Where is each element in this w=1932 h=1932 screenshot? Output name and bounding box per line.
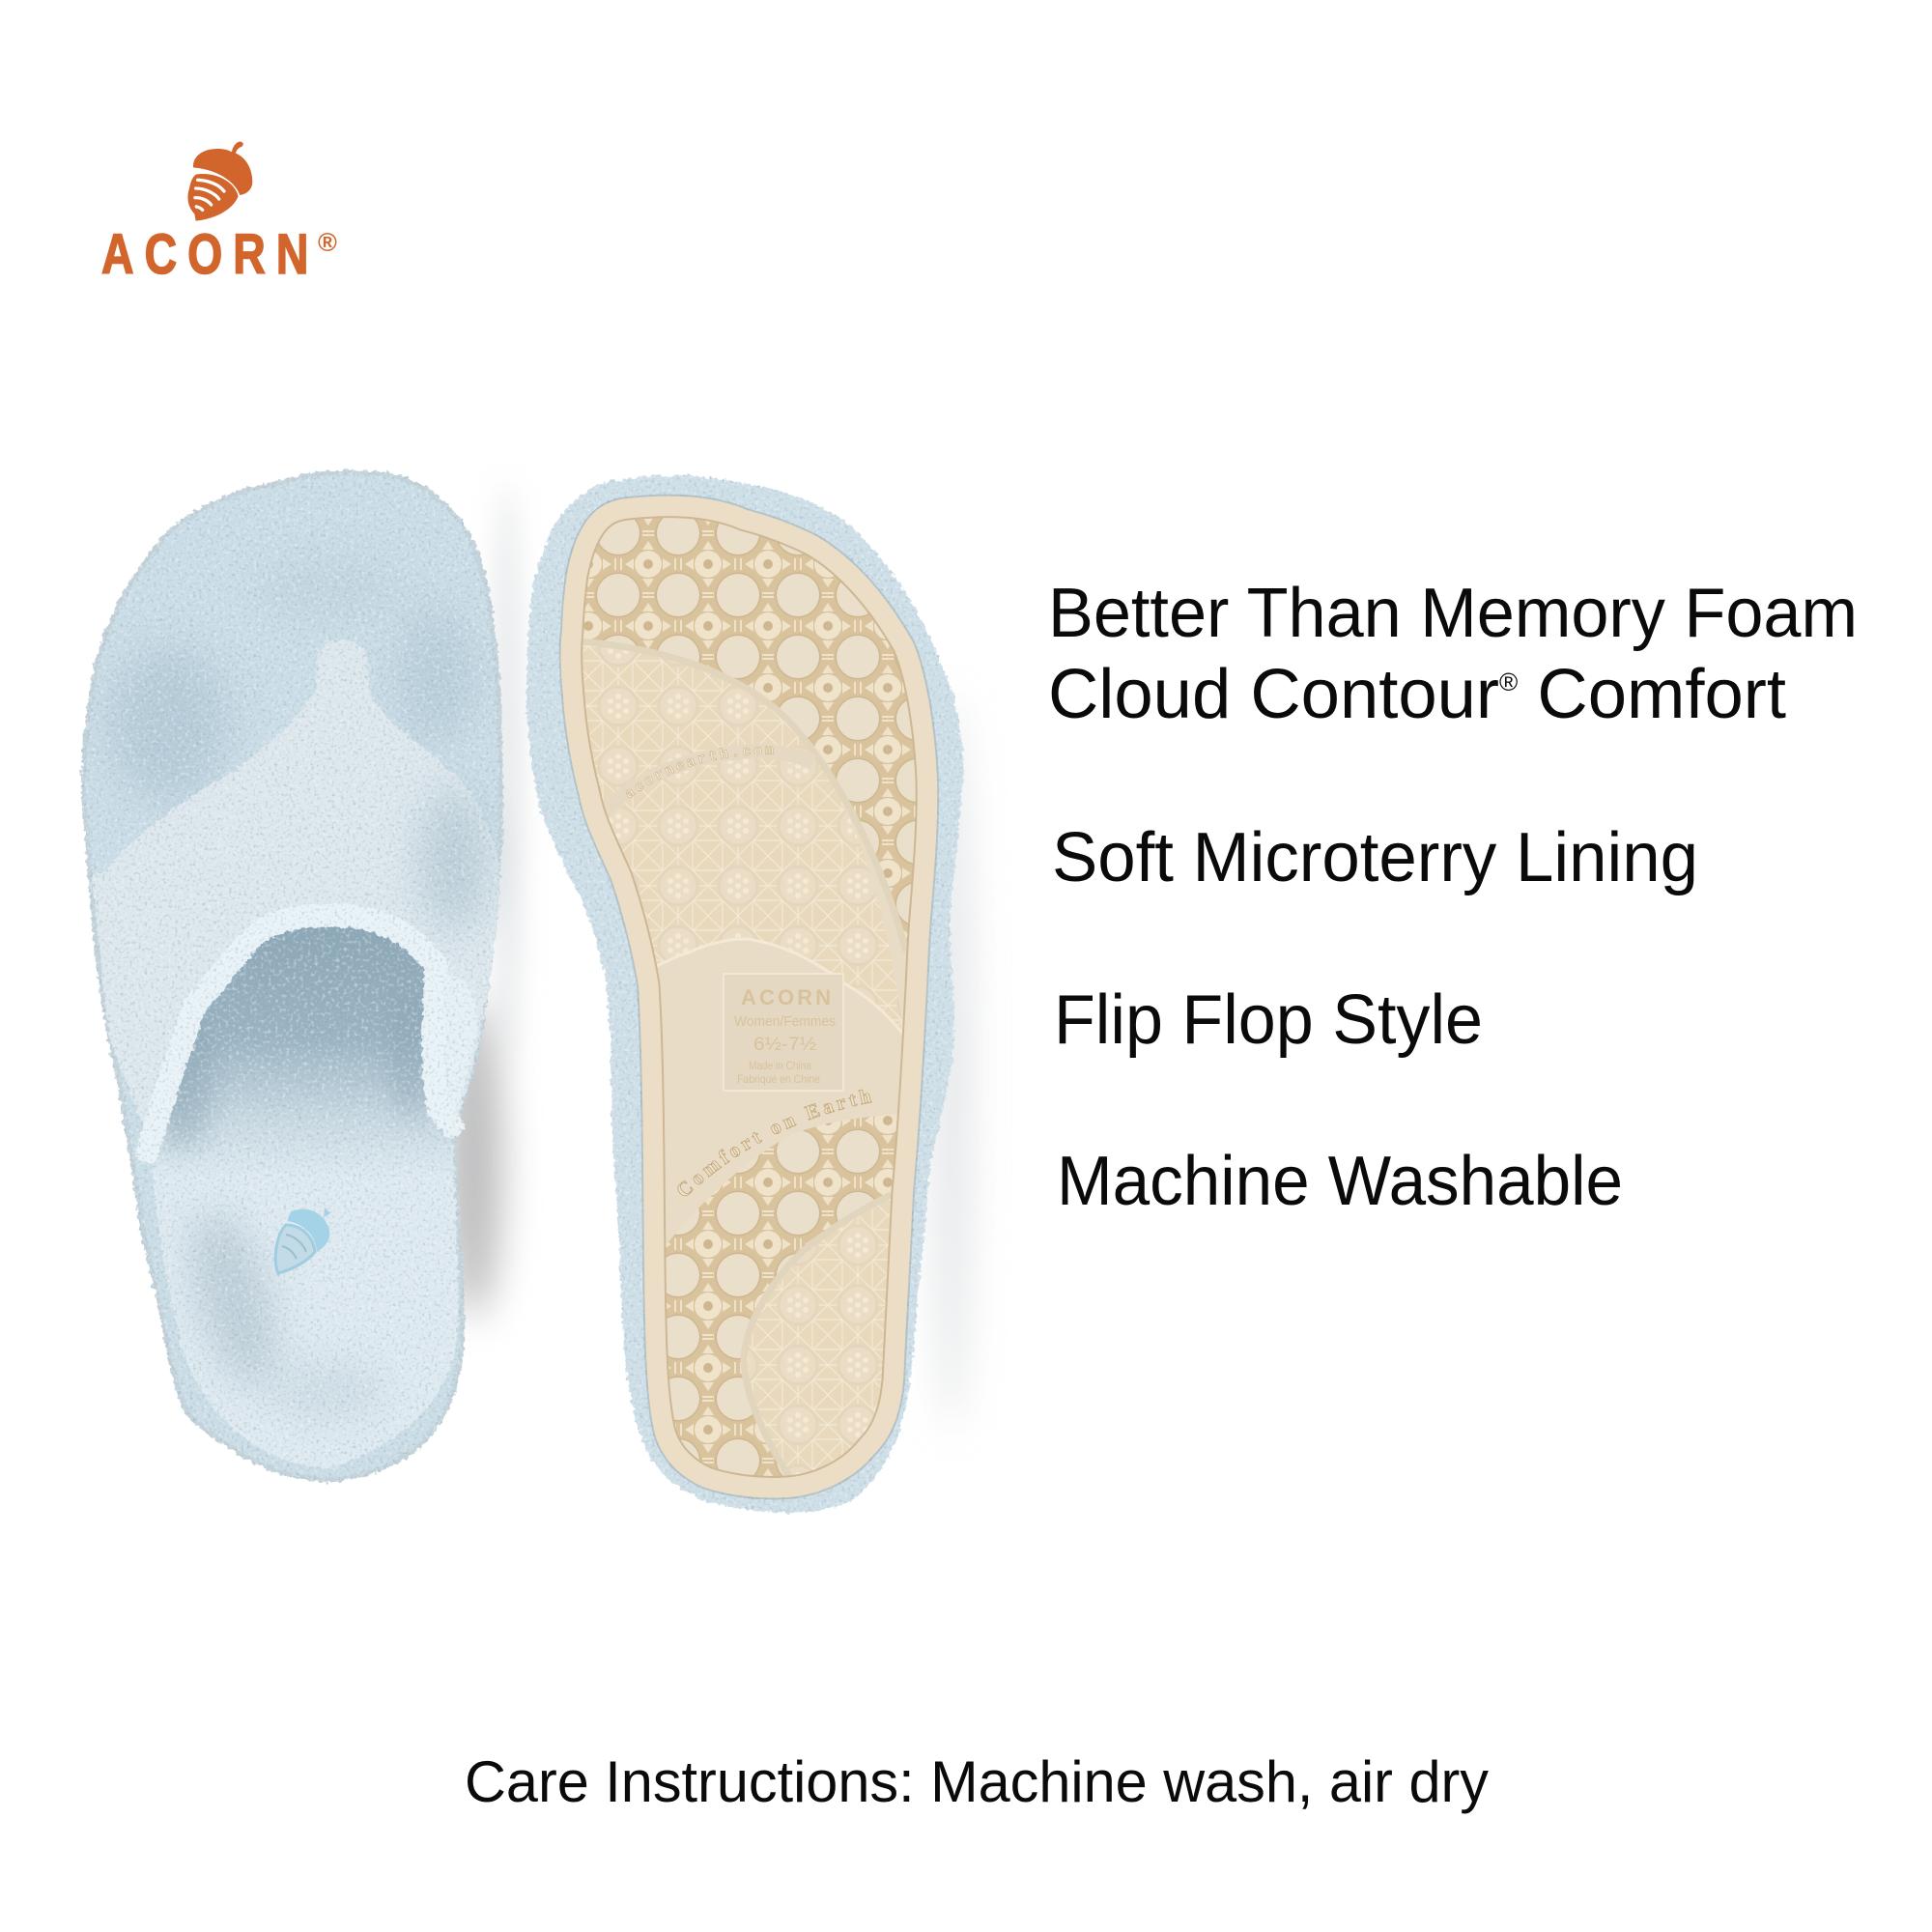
feature: cloud contour: Comfort [1518,656,1786,733]
forefoot lattice tread [583,645,902,1031]
label brand: ACORN [741,985,831,1009]
heel shading [175,1202,386,1420]
thong strap [92,640,499,1155]
website channel [599,752,813,816]
lattice arch edge [638,939,904,1036]
infographic canvas [79,141,1853,1814]
forefoot ring tread [566,518,937,942]
label origin: Made in China [749,1059,811,1072]
feature: memory foam: Better Than Memory Foam [1048,575,1858,652]
icon: embroidered acorn [275,1208,330,1273]
logo: Acorn [101,142,337,286]
right strap side [444,976,477,1121]
strap shading [419,787,489,932]
logo wordmark: ACORN [101,223,308,286]
feature: microterry: Soft Microterry Lining [1052,819,1698,896]
label gender: Women/Femmes [734,1013,836,1030]
sole rim groove [561,497,937,1498]
size label box [724,974,843,1091]
heel ring tread [647,1116,915,1476]
care instructions: Care Instructions: Machine wash, air dry [465,1749,1489,1814]
registered mark: ® [318,228,337,257]
website text: acornearth.com [626,746,773,798]
icon: acorn [187,142,252,221]
terry shadow under sole [561,497,937,1498]
slipper body [84,472,501,1480]
feature: flip flop: Flip Flop Style [1054,981,1483,1059]
footbed [152,923,458,1468]
feature list [1048,575,1858,1220]
tagline text: Comfort on Earth [678,1090,872,1196]
footbed side shading [155,976,432,1150]
forefoot channel [583,639,907,952]
sole base [561,497,937,1498]
feature: cloud contour: ® [1499,668,1518,696]
right slipper (sole view) [525,473,964,1515]
sole rim [561,497,937,1498]
feature: cloud contour: Cloud Contour [1048,656,1496,733]
rubber sole [560,497,937,1497]
terry upper edge [526,475,963,1513]
label size: 6½-7½ [753,1035,816,1055]
toe bed shading [111,560,475,802]
label origin french: Fabriqué en Chine [737,1072,820,1086]
feature: washable: Machine Washable [1057,1143,1623,1220]
left slipper (top view) [84,472,501,1480]
shadows behind slippers [444,483,971,1430]
heel lattice tread [740,1192,891,1476]
strap collar [147,916,452,1151]
